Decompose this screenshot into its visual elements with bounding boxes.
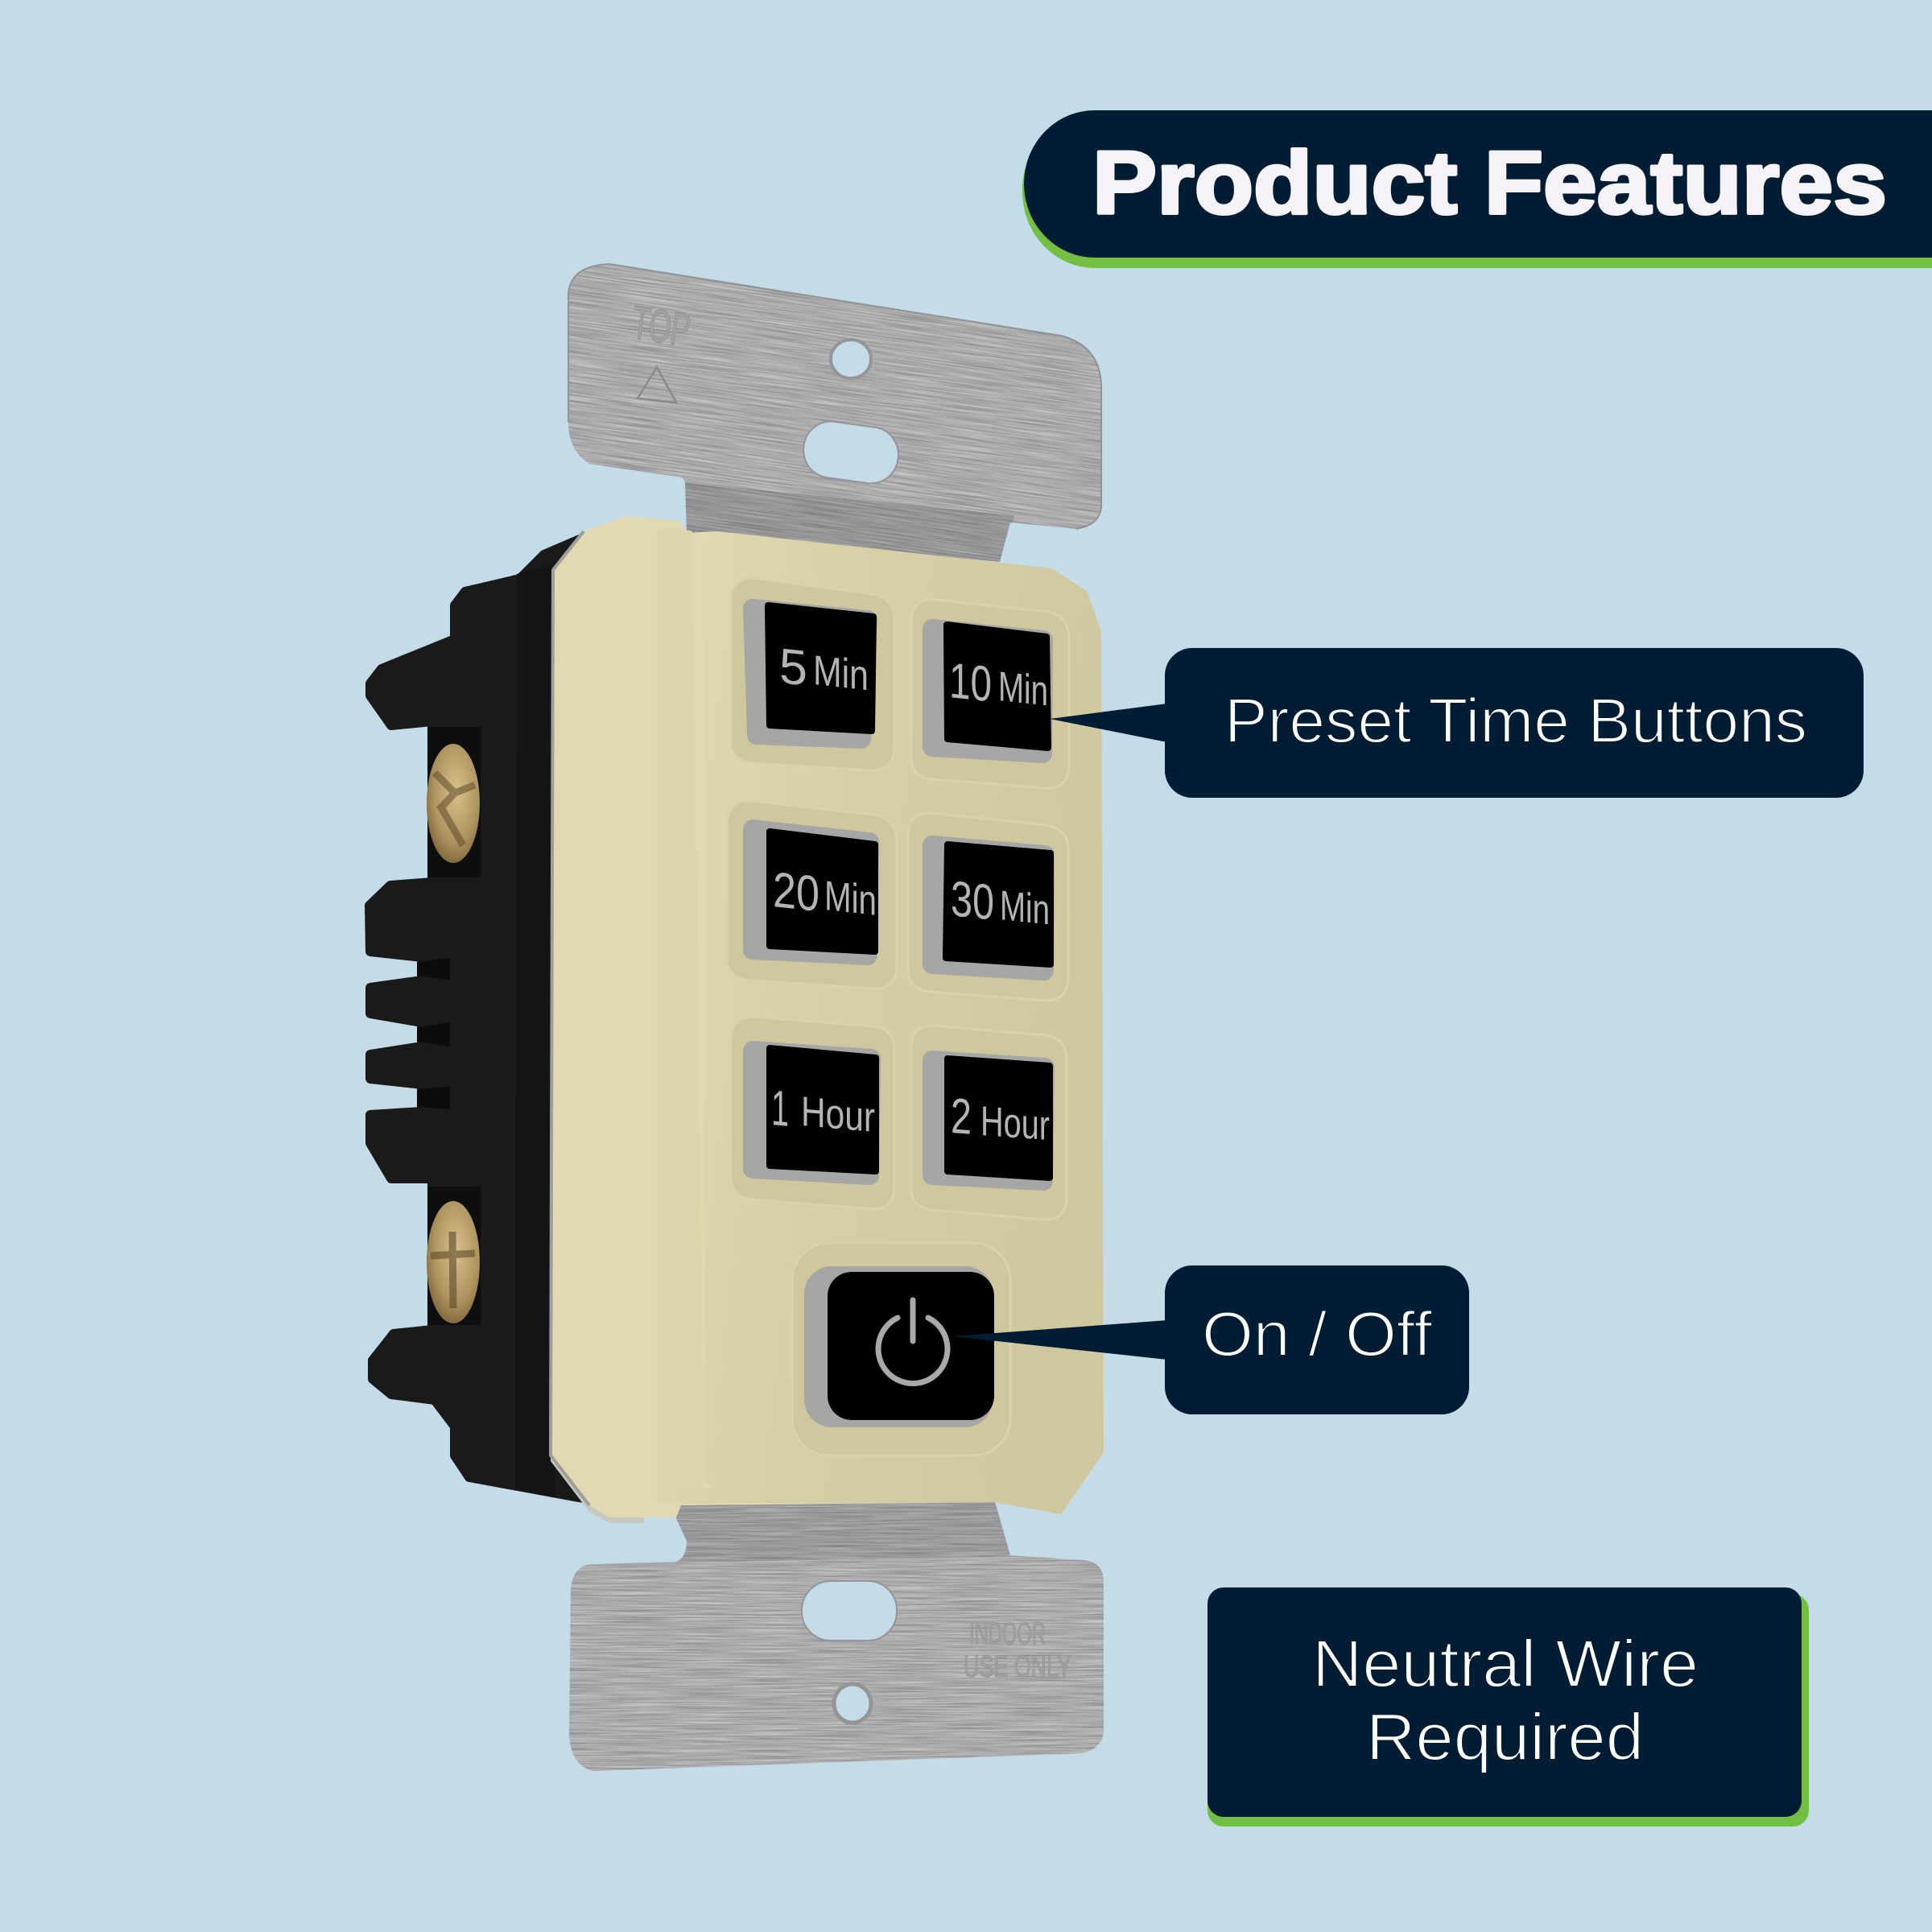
icon: power symbol [878,1300,947,1384]
top brass terminal screw [427,744,480,863]
callout: Neutral Wire Required: Required [1366,1699,1644,1774]
callout: On / Off: On / Off [1202,1298,1432,1369]
title banner: Product Features [1022,110,1932,268]
button: 1 Hour: 1 [771,1080,789,1137]
bottom metal mounting plate [569,1502,1104,1771]
button: 2 Hour: Hour [980,1098,1050,1150]
callout: Neutral Wire Required: Neutral Wire [1312,1626,1699,1701]
embossed TOP text: TOP [629,297,694,357]
button: power on/off [792,1243,1010,1455]
button: 30 Min [908,813,1068,1001]
button: 5 Min [731,578,894,770]
mounting hole [834,1684,871,1723]
embossed triangle [638,367,676,402]
button: 30 Min: 30 [951,871,994,931]
button: 1 Hour [731,1017,894,1209]
embossed USE ONLY text: USE ONLY [964,1650,1071,1684]
button: 20 Min: Min [824,873,877,925]
black rear housing [369,538,612,1502]
ivory faceplate [551,516,1104,1523]
button: 10 Min: Min [998,663,1048,715]
button: 2 Hour: 2 [951,1088,972,1146]
title text: Product Features [1092,134,1887,233]
button: 30 Min: Min [1000,882,1050,934]
infographic canvas [365,110,1932,1827]
button: 1 Hour: Hour [801,1088,875,1141]
mounting slot [802,1581,897,1641]
callout: Neutral Wire Required [1208,1587,1809,1827]
button: 20 Min: 20 [773,862,819,923]
mounting slot [800,418,902,487]
button: 20 Min [727,801,897,989]
button: 10 Min [911,600,1069,788]
top metal mounting plate [568,263,1102,562]
bottom brass terminal screw [427,1201,480,1323]
callout: Preset Time Buttons [1050,648,1864,798]
mounting hole [831,340,871,378]
button: 2 Hour [911,1026,1067,1220]
embossed INDOOR text: INDOOR [969,1617,1046,1651]
product: timer switch device [369,126,1253,1787]
button: 5 Min: 5 [779,638,807,697]
button: 5 Min: Min [813,647,869,700]
callout: On / Off [952,1265,1469,1414]
front face [656,531,1104,1514]
callout: Preset Time Buttons: Preset Time Buttons [1224,685,1807,756]
button: 10 Min: 10 [949,653,992,713]
